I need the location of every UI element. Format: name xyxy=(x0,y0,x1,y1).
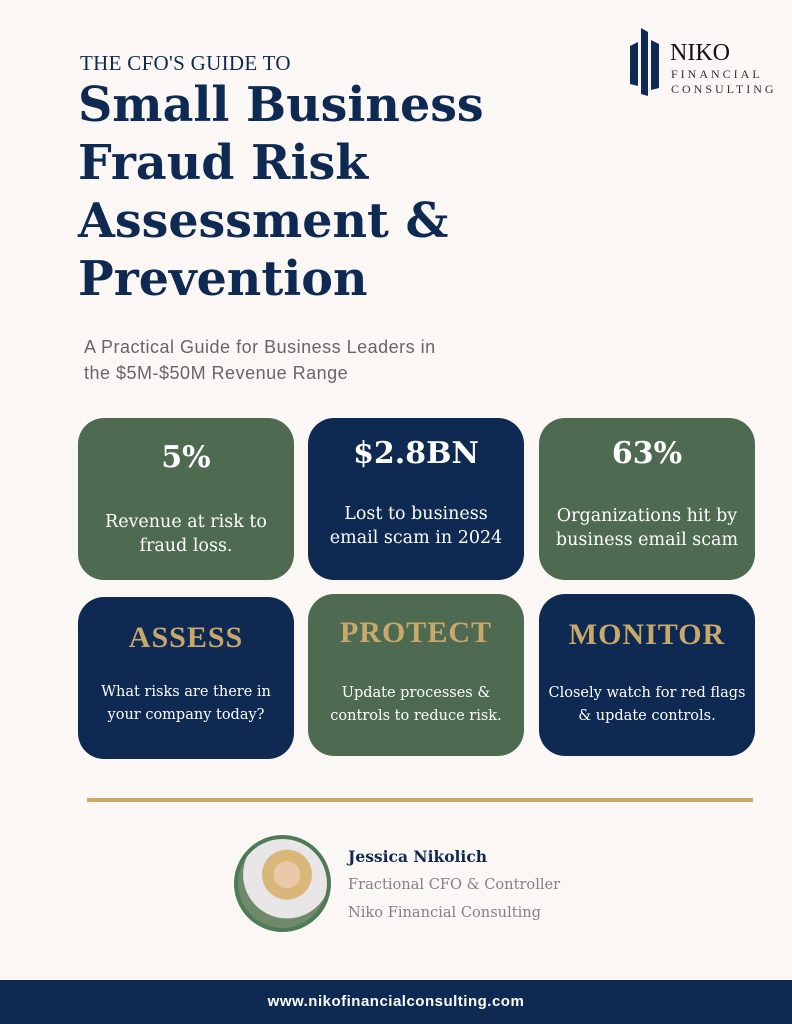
subtitle xyxy=(84,337,436,383)
main title: Fraud Risk xyxy=(78,135,368,191)
step card: assess xyxy=(78,597,294,759)
main title: Prevention xyxy=(78,251,368,307)
step card: assess: ASSESS xyxy=(129,621,243,654)
stat card: $2.8BN xyxy=(308,418,524,580)
author info xyxy=(346,847,560,921)
logo xyxy=(630,28,777,96)
stat card: 63%: business email scam xyxy=(556,530,738,550)
stat card: $2.8BN: Lost to business xyxy=(344,504,488,524)
step card: protect xyxy=(308,594,524,756)
footer bar: www.nikofinancialconsulting.com xyxy=(268,993,524,1010)
subtitle: A Practical Guide for Business Leaders in xyxy=(84,337,436,357)
step card: protect: controls to reduce risk. xyxy=(330,708,502,724)
author info: Jessica Nikolich xyxy=(348,847,487,866)
kicker heading: THE CFO'S GUIDE TO xyxy=(80,51,291,75)
stat card: 5% xyxy=(78,418,294,580)
stat card: 5%: fraud loss. xyxy=(140,536,232,556)
author photo xyxy=(234,835,331,932)
footer bar xyxy=(0,980,792,1024)
step card: monitor: & update controls. xyxy=(578,708,716,724)
stat card: 63%: 63% xyxy=(612,436,682,471)
step card: assess: your company today? xyxy=(108,707,264,723)
logo: CONSULTING xyxy=(671,82,777,96)
step card: monitor: MONITOR xyxy=(569,618,725,651)
stat card: $2.8BN: $2.8BN xyxy=(353,436,479,471)
author info: Fractional CFO & Controller xyxy=(348,876,560,893)
stat card: 5%: Revenue at risk to xyxy=(105,512,267,532)
author info: Niko Financial Consulting xyxy=(348,904,541,921)
main title: Assessment & xyxy=(78,193,448,249)
step card: monitor xyxy=(539,594,755,756)
stat card: $2.8BN: email scam in 2024 xyxy=(330,528,502,548)
step card: protect: PROTECT xyxy=(340,616,492,649)
logo: FINANCIAL xyxy=(671,67,763,81)
main title: Small Business xyxy=(78,77,484,133)
subtitle: the $5M-$50M Revenue Range xyxy=(84,363,348,383)
main title xyxy=(78,77,484,307)
step card: assess: What risks are there in xyxy=(101,684,271,700)
stat card: 63% xyxy=(539,418,755,580)
step card: protect: Update processes & xyxy=(342,685,490,701)
step card: monitor: Closely watch for red flags xyxy=(549,685,745,701)
stat card: 63%: Organizations hit by xyxy=(557,506,737,526)
stat card: 5%: 5% xyxy=(161,440,211,475)
logo: NIKO xyxy=(670,40,730,66)
